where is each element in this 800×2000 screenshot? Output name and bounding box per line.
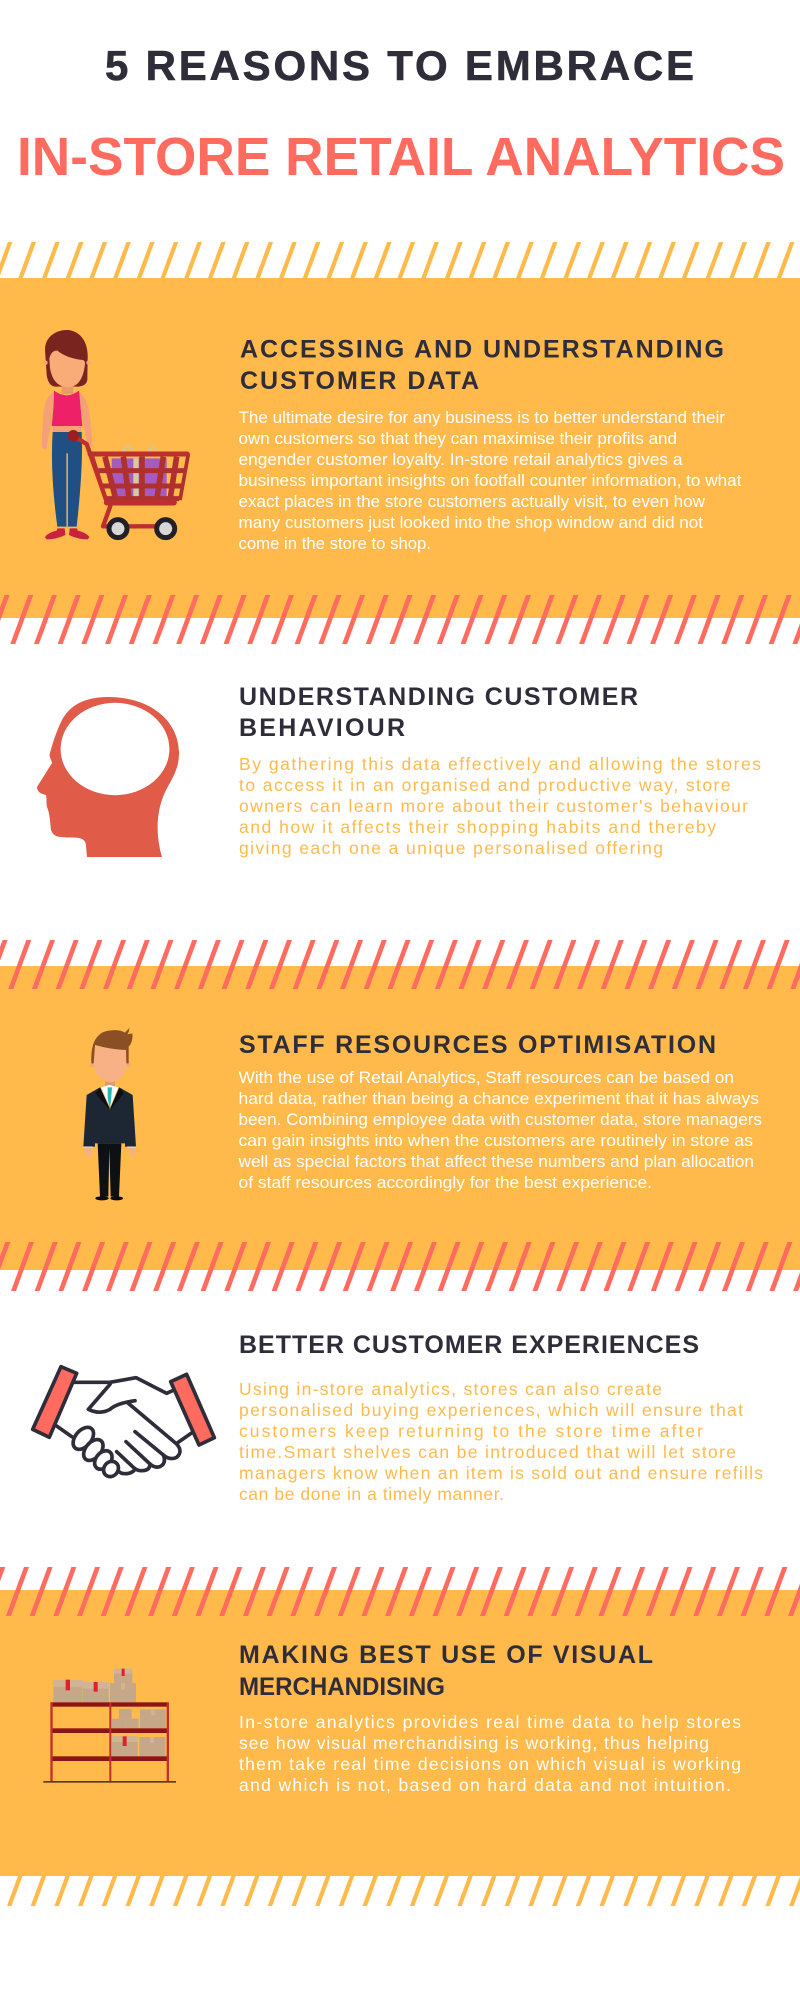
panel: understanding customer behaviour <box>37 683 761 858</box>
heading <box>240 336 724 395</box>
icon: woman with shopping cart <box>42 330 188 539</box>
heading: STAFF RESOURCES OPTIMISATION <box>239 1031 716 1059</box>
panel: staff resources optimisation <box>83 1028 762 1200</box>
body text: been. Combining employee data with customer data, store managers <box>238 1110 762 1129</box>
body text: owners can learn more about their customer's behaviour <box>239 796 748 816</box>
icon: businessman <box>83 1028 136 1200</box>
heading: CUSTOMER DATA <box>240 367 479 395</box>
body text: can gain insights into when the customers are routinely in store as <box>238 1131 753 1150</box>
title <box>17 42 785 187</box>
body text <box>238 408 742 553</box>
body text: and how it affects their shopping habits and thereby <box>239 817 716 837</box>
body text: In-store analytics provides real time data to help stores <box>239 1712 741 1732</box>
icon: shelves with boxes <box>43 1669 176 1783</box>
body text: hard data, rather than being a chance experiment that it has always <box>238 1089 759 1108</box>
body text: time.Smart shelves can be introduced that will let store <box>239 1442 736 1462</box>
body text: well as special factors that affect these numbers and plan allocation <box>237 1152 754 1171</box>
heading: BEHAVIOUR <box>239 714 405 742</box>
heading: ACCESSING AND UNDERSTANDING <box>240 336 724 364</box>
body text: to access it in an organised and productive way, store <box>239 775 730 795</box>
panel: better customer experiences <box>33 1331 763 1504</box>
body text <box>239 1379 763 1504</box>
body text: The ultimate desire for any business is to better understand their <box>238 408 725 427</box>
heading: MERCHANDISING <box>239 1673 445 1701</box>
body text: many customers just looked into the shop window and did not <box>238 513 703 532</box>
body text <box>237 1068 762 1192</box>
body text: see how visual merchandising is working, thus helping <box>239 1733 709 1753</box>
body text: By gathering this data effectively and allowing the stores <box>239 754 761 774</box>
heading <box>239 1641 653 1701</box>
body text: engender customer loyalty. In-store retail analytics gives a <box>238 450 683 469</box>
body text: own customers so that they can maximise their profits and <box>238 429 677 448</box>
heading: MAKING BEST USE OF VISUAL <box>239 1641 653 1669</box>
body text: giving each one a unique personalised offering <box>239 838 663 858</box>
body text: managers know when an item is sold out and ensure refills <box>239 1463 763 1483</box>
icon: head silhouette <box>37 697 179 857</box>
body text: Using in-store analytics, stores can also create <box>239 1379 662 1399</box>
body text <box>239 1712 741 1795</box>
body text: of staff resources accordingly for the best experience. <box>238 1173 652 1192</box>
heading <box>239 683 638 742</box>
body text: can be done in a timely manner. <box>239 1484 504 1504</box>
heading: UNDERSTANDING CUSTOMER <box>239 683 638 711</box>
body text: business important insights on footfall counter information, to what <box>238 471 742 490</box>
body text: personalised buying experiences, which will ensure that <box>239 1400 743 1420</box>
body text: exact places in the store customers actually visit, to even how <box>238 492 706 511</box>
panel: accessing and understanding customer data <box>42 330 742 553</box>
title: IN-STORE RETAIL ANALYTICS <box>17 127 785 187</box>
body text: customers keep returning to the store time after <box>239 1421 703 1441</box>
body text: and which is not, based on hard data and not intuition. <box>239 1775 731 1795</box>
body text: come in the store to shop. <box>238 534 431 553</box>
panel: making best use of visual merchandising <box>43 1641 741 1795</box>
body text <box>239 754 761 858</box>
heading: BETTER CUSTOMER EXPERIENCES <box>239 1331 699 1359</box>
body text: them take real time decisions on which visual is working <box>239 1754 741 1774</box>
body text: With the use of Retail Analytics, Staff resources can be based on <box>238 1068 734 1087</box>
icon: handshake <box>33 1367 214 1480</box>
title: 5 REASONS TO EMBRACE <box>105 42 694 89</box>
